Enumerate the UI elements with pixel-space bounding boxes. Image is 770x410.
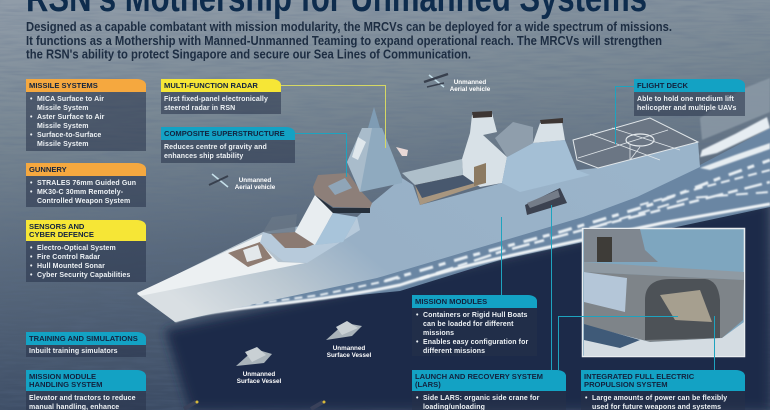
aft hangar top [495,122,533,157]
ship wake foam [173,78,770,322]
door [474,163,486,186]
panel: training and simulations: Inbuilt training simulators [29,348,118,355]
panel: gunnery [26,163,146,207]
gun deck patch [228,242,272,267]
panel: sensors and cyber defence: Fire Control Radar [37,254,100,261]
panel: mission module handling system: Elevator and tractors to reduce [29,395,136,402]
lower bridge [260,217,360,263]
panel: mission modules: can be loaded for different [423,321,514,328]
intro text: It functions as a Mothership with Manned-Unmanned Teaming to expand operational reach. The MRCVs will strengthen [26,33,662,48]
label: unmanned aerial vehicle left: Aerial vehicle [235,184,275,191]
far rail and waist back wall [402,159,463,185]
panel: missile systems: Missile System [37,141,89,148]
panel: launch and recovery system [412,370,566,410]
unmanned aerial vehicle right [424,74,448,87]
unmanned surface vessel left [236,347,272,366]
panel: mission modules: missions [423,330,454,337]
panel: integrated full electric propulsion system: Large amounts of power can be flexibly [592,395,727,402]
panel: mission module handling system: MISSION MODULE [29,372,96,381]
label: unmanned surface vessel left [237,371,281,385]
intro text [26,19,672,62]
panel: mission module handling system: HANDLING SYSTEM [29,380,102,389]
panel: mission modules: different missions [423,348,485,355]
panel: mission modules: Enables easy configuration for [423,339,528,346]
label: unmanned surface vessel right: Surface Vessel [327,352,371,359]
panel: integrated full electric propulsion system: INTEGRATED FULL ELECTRIC [584,372,694,381]
side bay [525,188,567,215]
panel: sensors and cyber defence: CYBER DEFENCE [29,230,94,239]
funnel caps [472,111,492,118]
label: unmanned aerial vehicle right: Unmanned [454,79,486,86]
panel: training and simulations: TRAINING AND SIMULATIONS [29,334,138,343]
ship [137,107,700,322]
panel: sensors and cyber defence: SENSORS AND [29,222,84,231]
bow deck [137,234,305,296]
label: unmanned aerial vehicle left [235,177,275,191]
panel: composite superstructure: COMPOSITE SUPERSTRUCTURE [164,129,285,138]
mast [347,128,402,192]
bridge white face [295,195,333,245]
gun [243,245,262,262]
panel: integrated full electric propulsion system [581,370,745,410]
panel: sensors and cyber defence: Cyber Security Capabilities [37,272,130,279]
label: unmanned surface vessel right [327,345,371,359]
panel: missile systems: Missile System [37,105,89,112]
panel: composite superstructure: Reduces centre of gravity and [164,144,267,151]
panel: multi-function radar: steered radar in RSN [164,105,235,112]
label: unmanned surface vessel right: Unmanned [333,345,365,352]
panel: mission module handling system [26,370,146,410]
panel: launch and recovery system: Side LARS: organic side crane for [423,395,540,402]
aft block [502,140,590,192]
hull side [137,142,700,322]
panel: multi-function radar [161,79,281,114]
panel: flight deck [634,79,745,116]
label: unmanned aerial vehicle left: Unmanned [239,177,271,184]
unmanned aerial vehicle left [209,174,228,187]
panel: launch and recovery system: (LARS) [415,380,441,389]
panel: gunnery: MK30-C 30mm Remotely- [37,189,123,196]
panel: sensors and cyber defence [26,220,146,282]
panel: flight deck: Able to hold one medium lift [637,96,734,103]
small craft [184,400,326,409]
panel: gunnery: Controlled Weapon System [37,198,130,205]
aft structure [462,113,507,187]
inset photo: stern cutaway [582,228,744,356]
panel: multi-function radar: MULTI-FUNCTION RADAR [164,81,258,90]
label: unmanned surface vessel left: Surface Vessel [237,378,281,385]
panel: missile systems: MISSILE SYSTEMS [29,81,98,90]
panel: mission modules [412,295,537,355]
label: unmanned aerial vehicle right [450,79,490,93]
panel: missile systems [26,79,146,151]
panel: composite superstructure: enhances ship stability [164,153,243,160]
panel: launch and recovery system: LAUNCH AND RECOVERY SYSTEM [415,372,543,381]
label: unmanned surface vessel left: Unmanned [243,371,275,378]
intro text: the RSN's ability to protect Singapore and secure our Sea Lines of Communication. [26,46,471,62]
panel: training and simulations [26,332,146,357]
leader lines [281,86,714,370]
panel: missile systems: Missile System [37,123,89,130]
panel: composite superstructure [161,127,295,163]
panel: gunnery: STRALES 76mm Guided Gun [37,180,136,187]
panel: flight deck: FLIGHT DECK [637,81,688,90]
foredeck [313,173,372,208]
panel: mission modules: MISSION MODULES [415,297,487,306]
flight deck [573,118,698,168]
lower right dark water [165,200,770,410]
panel: multi-function radar: First fixed-panel electronically [164,96,268,103]
panel: sensors and cyber defence: Hull Mounted Sonar [37,263,105,270]
label: unmanned aerial vehicle right: Aerial vehicle [450,86,490,93]
waist deck recess [415,175,480,205]
panel: missile systems: Surface-to-Surface [37,132,101,139]
intro text: Designed as a capable combatant with mission modularity, the MRCVs can be deployed for a wide spectrum of missions. [26,19,672,34]
panel: missile systems: Aster Surface to Air [37,114,104,121]
panel: flight deck: helicopter and multiple UAVs [637,105,737,112]
panel: gunnery: GUNNERY [29,165,67,174]
helicopter marker [396,147,408,156]
panel: mission modules: Containers or Rigid Hull Boats [423,312,528,319]
panel: missile systems: MICA Surface to Air [37,96,104,103]
panel: sensors and cyber defence: Electro-Optical System [37,245,116,252]
panel: integrated full electric propulsion system: PROPULSION SYSTEM [584,380,668,389]
unmanned surface vessel right [326,321,362,340]
